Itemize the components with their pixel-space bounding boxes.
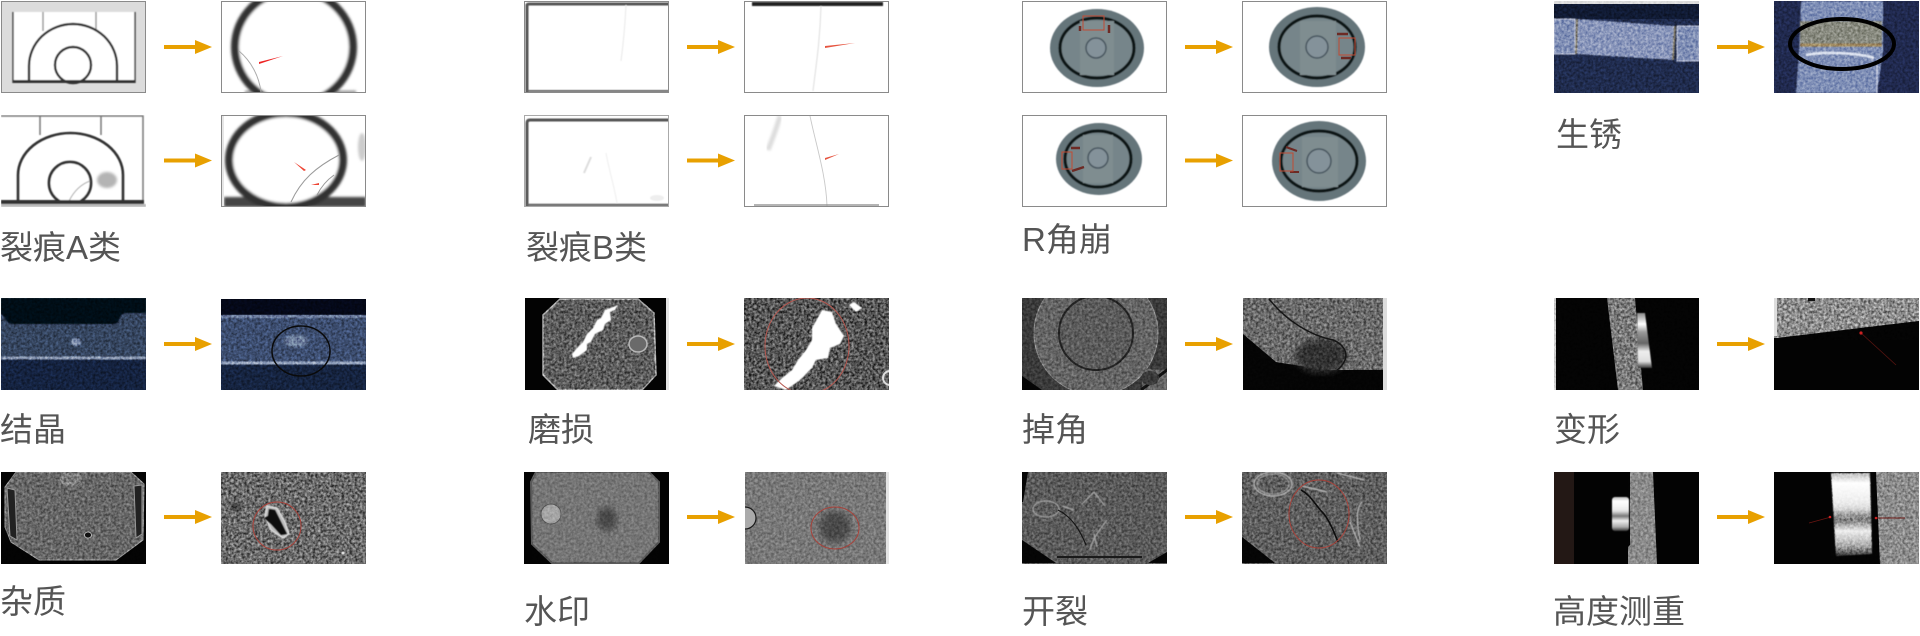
image: crack A sample 2 detail (221, 115, 366, 207)
label: 裂痕B类 (526, 229, 647, 266)
image: crack B sample 1 before (524, 1, 669, 93)
panel: 高度测重 (1553, 472, 1919, 630)
image: deformation before (1554, 298, 1699, 390)
panel: 掉角 (1022, 271, 1387, 448)
label: 掉角 (1022, 411, 1088, 448)
image: water stain before (524, 472, 669, 564)
label: 开裂 (1022, 593, 1088, 630)
panel: 生锈 (1554, 1, 1919, 153)
label: 变形 (1554, 411, 1620, 448)
panel: 磨损 (525, 298, 897, 448)
arrow (1185, 510, 1233, 524)
panel: 裂痕B类 (524, 1, 889, 266)
arrow (687, 154, 735, 168)
arrow (1717, 40, 1765, 54)
label: 水印 (524, 593, 590, 630)
image: crack A sample 2 before (1, 115, 146, 207)
label: 结晶 (0, 411, 66, 448)
panel: 杂质 (0, 471, 366, 620)
image: water stain detail (745, 472, 889, 564)
image: cracking detail (1242, 472, 1387, 564)
label: R角崩 (1022, 221, 1112, 258)
image: R-corner chip sample 1 before (1022, 1, 1167, 93)
panel: 裂痕A类 (0, 0, 366, 266)
label: 高度测重 (1553, 593, 1685, 630)
image: crack A sample 1 before (1, 1, 146, 93)
image: crystallization before (1, 298, 146, 390)
image: corner drop detail (1243, 298, 1387, 390)
image: rust detail (1774, 1, 1919, 93)
image: impurity detail (221, 472, 366, 564)
arrow (164, 337, 212, 351)
arrow (1185, 154, 1233, 168)
arrow (687, 40, 735, 54)
image: cracking before (1022, 472, 1167, 564)
image: rust before (1554, 1, 1699, 93)
image: wear before (525, 298, 669, 390)
image: height measurement detail (1774, 472, 1919, 564)
label: 生锈 (1556, 116, 1622, 153)
label: 裂痕A类 (0, 229, 121, 266)
arrow (1185, 337, 1233, 351)
panel: 变形 (1554, 298, 1919, 448)
arrow (1717, 510, 1765, 524)
label: 杂质 (0, 583, 66, 620)
image: R-corner chip sample 1 detail (1242, 1, 1387, 93)
image: deformation detail (1774, 298, 1919, 390)
image: crystallization detail (221, 299, 366, 390)
image: impurity before (1, 472, 146, 564)
panel: R角崩 (1022, 1, 1387, 258)
image: wear detail (744, 298, 889, 390)
panel: 开裂 (1022, 472, 1387, 630)
image: crack B sample 1 detail (744, 1, 889, 93)
image: crack A sample 1 detail (221, 1, 366, 93)
image: crack B sample 2 detail (744, 115, 889, 207)
arrow (687, 337, 735, 351)
panel: 结晶 (0, 298, 366, 448)
image: crack B sample 2 before (524, 115, 669, 207)
panel: 水印 (524, 472, 889, 630)
arrow (164, 510, 212, 524)
image: R-corner chip sample 2 before (1022, 115, 1167, 207)
arrow (164, 154, 212, 168)
arrow (164, 40, 212, 54)
arrow (1717, 337, 1765, 351)
image: height measurement before (1554, 472, 1699, 564)
image: corner drop before (1022, 298, 1167, 390)
arrow (687, 510, 735, 524)
image: R-corner chip sample 2 detail (1242, 115, 1387, 207)
label: 磨损 (528, 411, 594, 448)
arrow (1185, 40, 1233, 54)
